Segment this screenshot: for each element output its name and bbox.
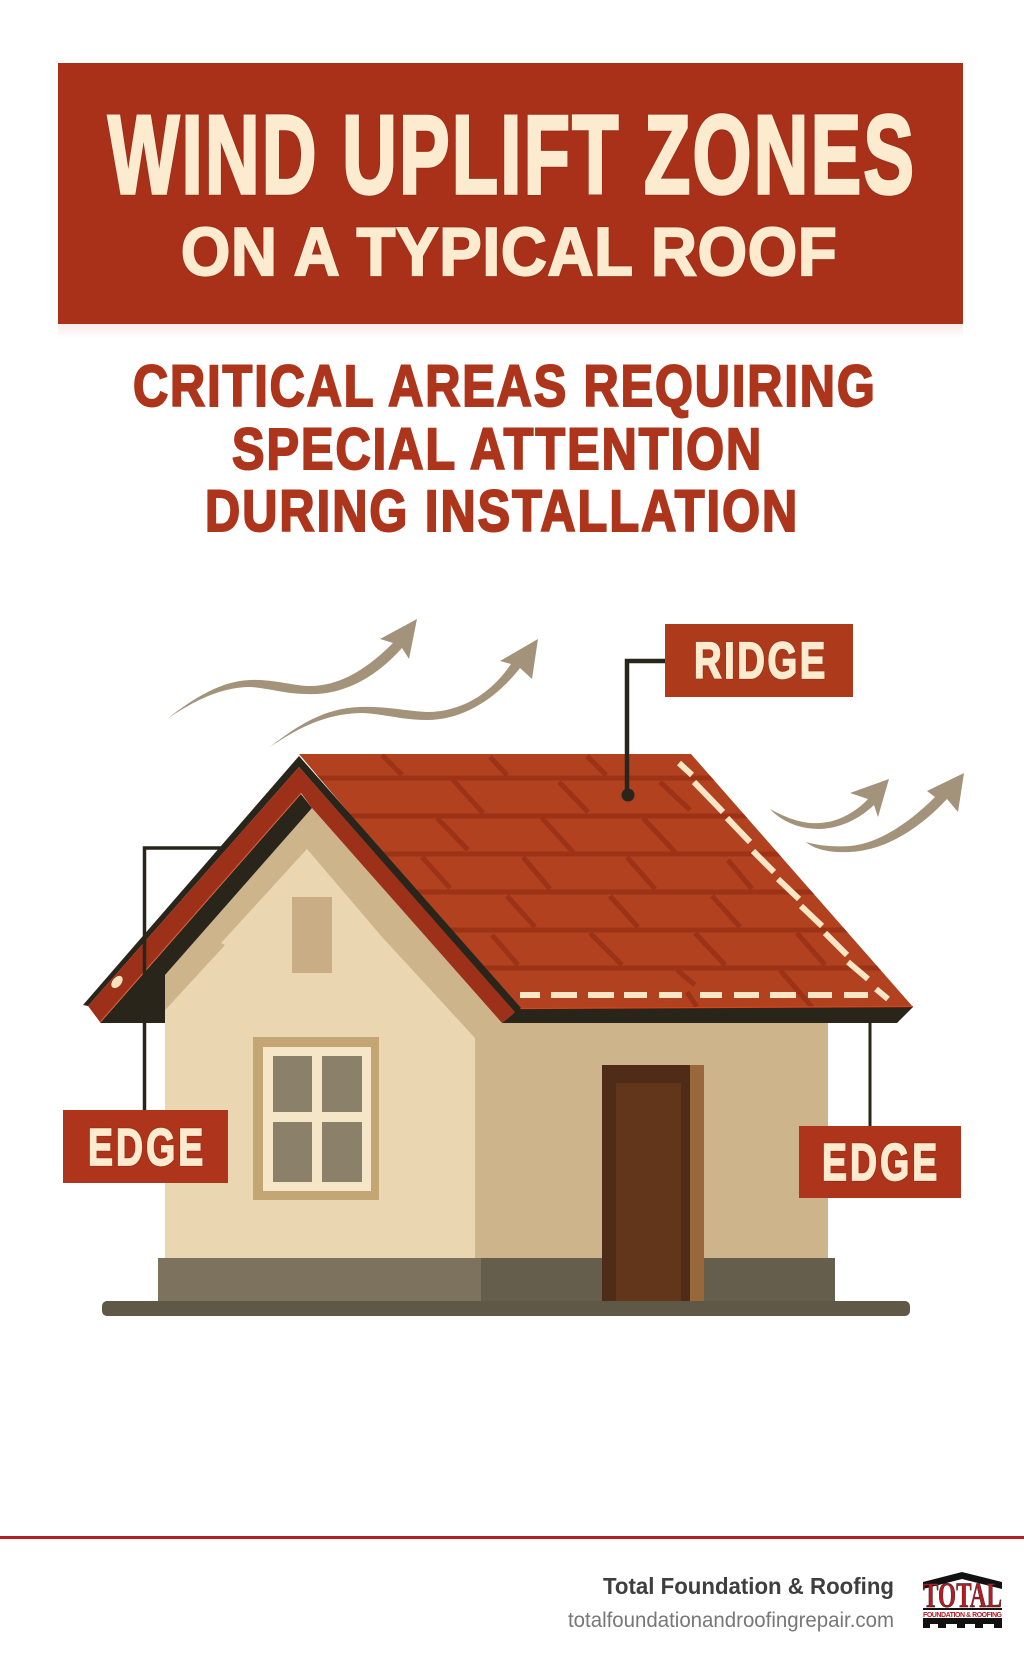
label: edge left: [63, 1110, 228, 1183]
subtitle: on a typical roof: ON A TYPICAL ROOF: [181, 214, 837, 289]
logo: [923, 1572, 1003, 1628]
heading: critical areas: [133, 355, 875, 544]
vent: [292, 897, 332, 973]
arrow: wind off right roof, upper: [770, 779, 889, 829]
title banner: [58, 63, 963, 338]
window: [253, 1037, 379, 1200]
leader line: ridge: [622, 661, 665, 802]
leader line: left edge: [144, 848, 222, 1110]
ground slab: [102, 1301, 910, 1316]
heading: critical areas: CRITICAL AREAS REQUIRING: [133, 355, 875, 419]
edge zone dashes: eave: [520, 992, 868, 998]
rake marker: [109, 974, 125, 990]
label: edge right: [799, 1126, 961, 1198]
title: wind uplift zones: WIND UPLIFT ZONES: [108, 94, 914, 218]
leader line: right edge: [868, 1023, 872, 1126]
footer divider: [0, 1536, 1024, 1539]
gable: dark underside: [100, 794, 312, 1023]
label: edge left: EDGE: [88, 1118, 203, 1176]
arrow: wind off right roof, lower: [806, 773, 964, 852]
heading: critical areas: SPECIAL ATTENTION: [232, 418, 761, 482]
roof: shingle plane: [290, 754, 913, 1010]
arrow: wind over left roof, upper: [167, 619, 417, 719]
wall: cream gable face: [165, 849, 475, 1258]
gable: red rake: [88, 767, 515, 1023]
footer: company name: Total Foundation & Roofing: [603, 1573, 894, 1599]
roof: fascia: [502, 1007, 913, 1023]
wall: right tan wall and gable band: [165, 808, 828, 1258]
heading: critical areas: DURING INSTALLATION: [205, 480, 797, 544]
logo: FOUNDATION & ROOFING: [923, 1612, 1003, 1619]
label: ridge: [665, 624, 853, 697]
gable: dark outer edge: [83, 756, 521, 1013]
label: ridge: RIDGE: [694, 632, 825, 689]
house illustration: [83, 754, 913, 1316]
arrow: wind over left roof, lower: [270, 639, 538, 747]
edge zone dashes: ridge side: [679, 763, 888, 999]
door: [602, 1065, 704, 1302]
footer: website: totalfoundationandroofingrepair.com: [568, 1609, 894, 1632]
foundation: [158, 1258, 835, 1301]
label: edge right: EDGE: [822, 1133, 937, 1191]
